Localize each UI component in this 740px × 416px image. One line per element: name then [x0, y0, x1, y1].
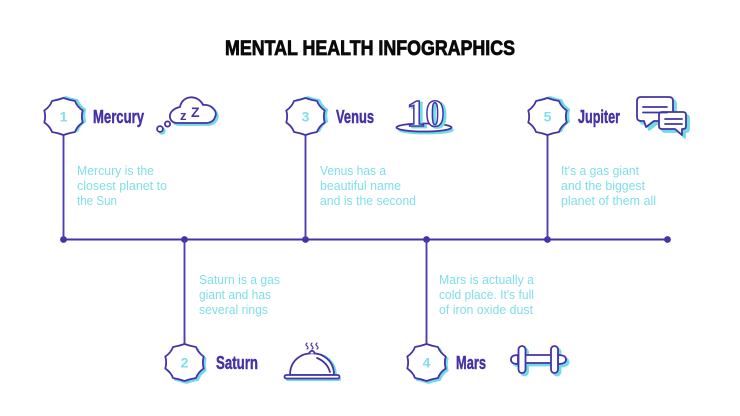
heading: Jupiter: Jupiter	[578, 107, 620, 127]
badge 5	[528, 97, 569, 135]
icon: sleeping cloud	[157, 97, 218, 134]
text: Mars: cold place. It's full	[439, 288, 534, 302]
icon: score ten	[396, 93, 453, 136]
icon: sleeping cloud: z	[180, 108, 187, 123]
heading: Venus: Venus	[336, 107, 374, 127]
heading: Mars: Mars	[456, 353, 486, 373]
badge 1: 1	[60, 108, 68, 124]
text: Venus	[320, 164, 416, 208]
text: Jupiter: and the biggest	[561, 179, 646, 193]
icon: score ten: 10	[409, 94, 447, 136]
badge 3: 3	[302, 108, 310, 124]
badge 1	[44, 97, 85, 135]
text: Mercury: Mercury is the	[77, 164, 154, 178]
text: Mars: Mars is actually a	[439, 273, 534, 287]
text: Venus: Venus has a	[320, 164, 386, 178]
badge 2: 2	[181, 354, 189, 370]
panel: Mars	[407, 240, 568, 383]
text: Mercury: the Sun	[77, 194, 117, 208]
title: MENTAL HEALTH INFOGRAPHICS	[225, 37, 515, 60]
badge 4	[407, 344, 448, 383]
panel: Mercury	[44, 97, 218, 239]
text: Saturn: giant and has	[199, 288, 271, 302]
text: Jupiter	[561, 164, 656, 208]
text: Saturn: Saturn is a gas	[199, 273, 280, 287]
timeline	[60, 236, 671, 243]
badge 2	[165, 344, 206, 383]
text: Mars	[439, 273, 534, 317]
heading: Mercury: Mercury	[93, 107, 144, 127]
text: Venus: and is the second	[320, 194, 416, 208]
text: Saturn	[199, 273, 280, 317]
panel: Saturn	[165, 240, 341, 383]
text: Saturn: several rings	[199, 303, 268, 317]
badge 5: 5	[544, 108, 552, 124]
panel: Venus	[286, 93, 453, 239]
text: Mercury: closest planet to	[77, 179, 167, 193]
heading: Saturn: Saturn	[216, 353, 258, 373]
badge 4: 4	[423, 354, 431, 370]
text: Venus: beautiful name	[320, 179, 401, 193]
icon: score ten: 10	[406, 93, 444, 135]
icon: sleeping cloud: Z	[191, 104, 200, 120]
badge 3	[286, 97, 327, 135]
text: Mercury	[77, 164, 167, 208]
text: Jupiter: planet of them all	[561, 194, 656, 208]
icon: chat bubbles	[637, 97, 689, 138]
icon: food cloche	[284, 343, 341, 381]
icon: dumbbell	[511, 346, 568, 376]
text: Jupiter: It's a gas giant	[561, 164, 640, 178]
panel: Jupiter	[528, 97, 689, 239]
text: Mars: of iron oxide dust	[439, 303, 534, 317]
